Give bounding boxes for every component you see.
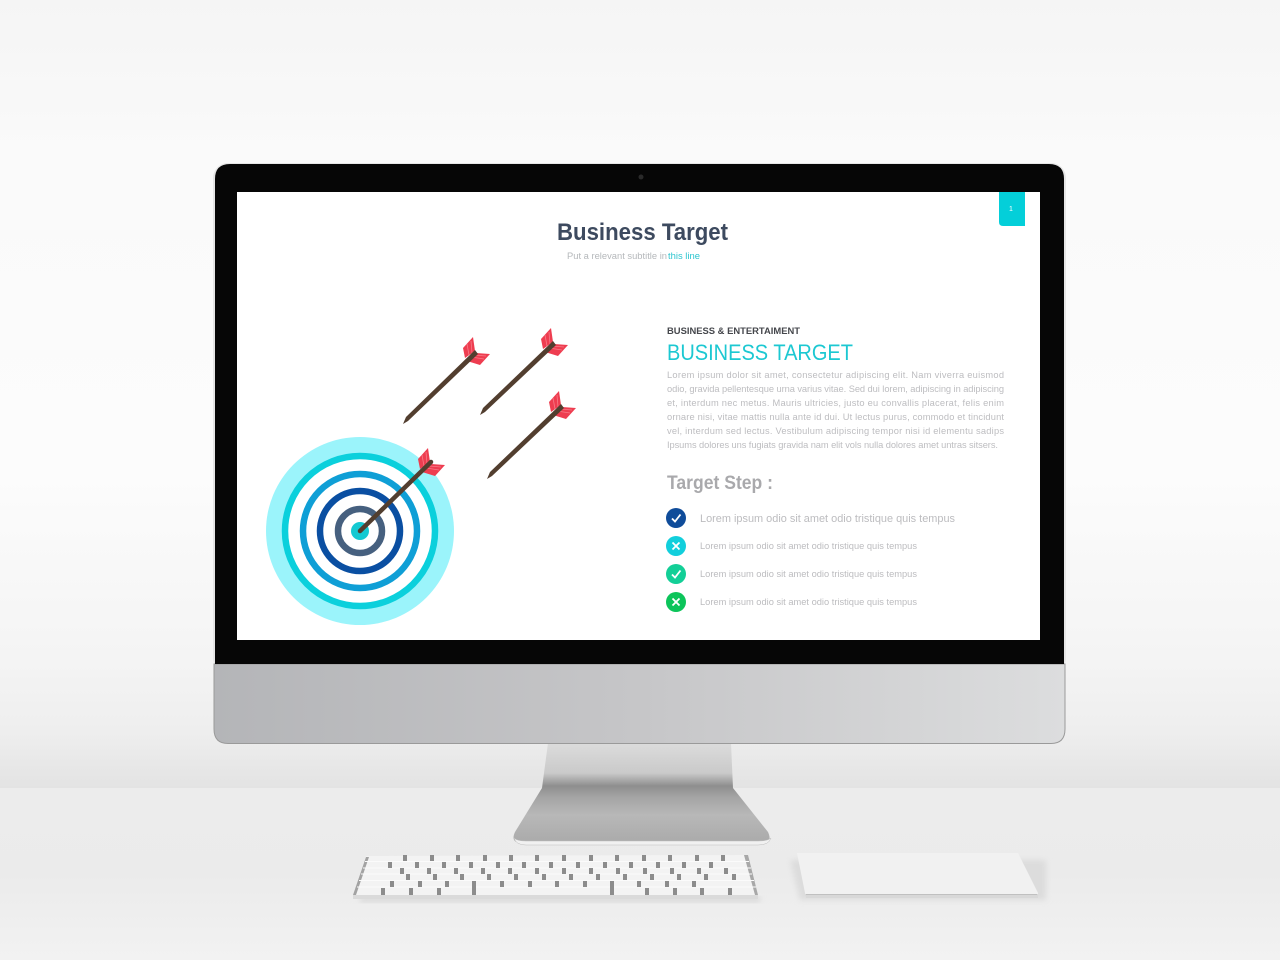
arrow in target xyxy=(360,448,445,531)
page number tab: 1 xyxy=(1009,206,1013,213)
step 2 xyxy=(666,536,917,556)
body paragraph: odio, gravida pellentesque urna varius vitae. Sed dui lorem, adipiscing in adipiscing xyxy=(667,384,1004,394)
eyebrow heading: BUSINESS & ENTERTAIMENT xyxy=(667,326,800,337)
trackpad xyxy=(790,853,1046,900)
slide screen xyxy=(237,192,1040,640)
subtitle: this line xyxy=(668,251,700,261)
flying arrow 2 xyxy=(480,328,568,415)
section heading: BUSINESS TARGET xyxy=(667,340,853,365)
subtitle: Put a relevant subtitle in xyxy=(567,251,667,261)
step 2: Lorem ipsum odio sit amet odio tristique quis tempus xyxy=(700,541,917,551)
step 3: Lorem ipsum odio sit amet odio tristique quis tempus xyxy=(700,569,917,579)
flying arrow 3 xyxy=(487,391,576,479)
body paragraph: et, interdum nec metus. Mauris ultricies, justo eu convallis placerat, felis enim xyxy=(667,398,1004,408)
flying arrow 1 xyxy=(403,337,490,424)
target illustration xyxy=(266,437,454,625)
title: Business Target xyxy=(557,219,728,246)
monitor body xyxy=(213,163,1066,744)
body paragraph: ornare nisi, vitae mattis nulla ante id dui. Ut lectus purus, commodo et tincidunt xyxy=(667,412,1004,422)
page number tab xyxy=(999,192,1025,226)
step 3 xyxy=(666,564,917,584)
keyboard xyxy=(353,855,760,902)
webcam xyxy=(638,174,644,180)
body paragraph xyxy=(667,370,1004,450)
body paragraph: vel, interdum sed lectus. Vestibulum adipiscing tempor nisi id elementu sadips xyxy=(667,426,1004,436)
step 4: Lorem ipsum odio sit amet odio tristique quis tempus xyxy=(700,597,917,607)
step 4 xyxy=(666,592,917,612)
body paragraph: Ipsums dolores uns fugiats gravida nam elit vols nulla dolores amet untras sitsers. xyxy=(667,440,998,450)
body paragraph: Lorem ipsum dolor sit amet, consectetur adipiscing elit. Nam viverra euismod xyxy=(667,370,1004,380)
step 1: Lorem ipsum odio sit amet odio tristique quis tempus xyxy=(700,513,955,525)
step 1 xyxy=(666,508,955,528)
target step heading: Target Step : xyxy=(667,473,773,494)
monitor stand xyxy=(514,743,771,845)
